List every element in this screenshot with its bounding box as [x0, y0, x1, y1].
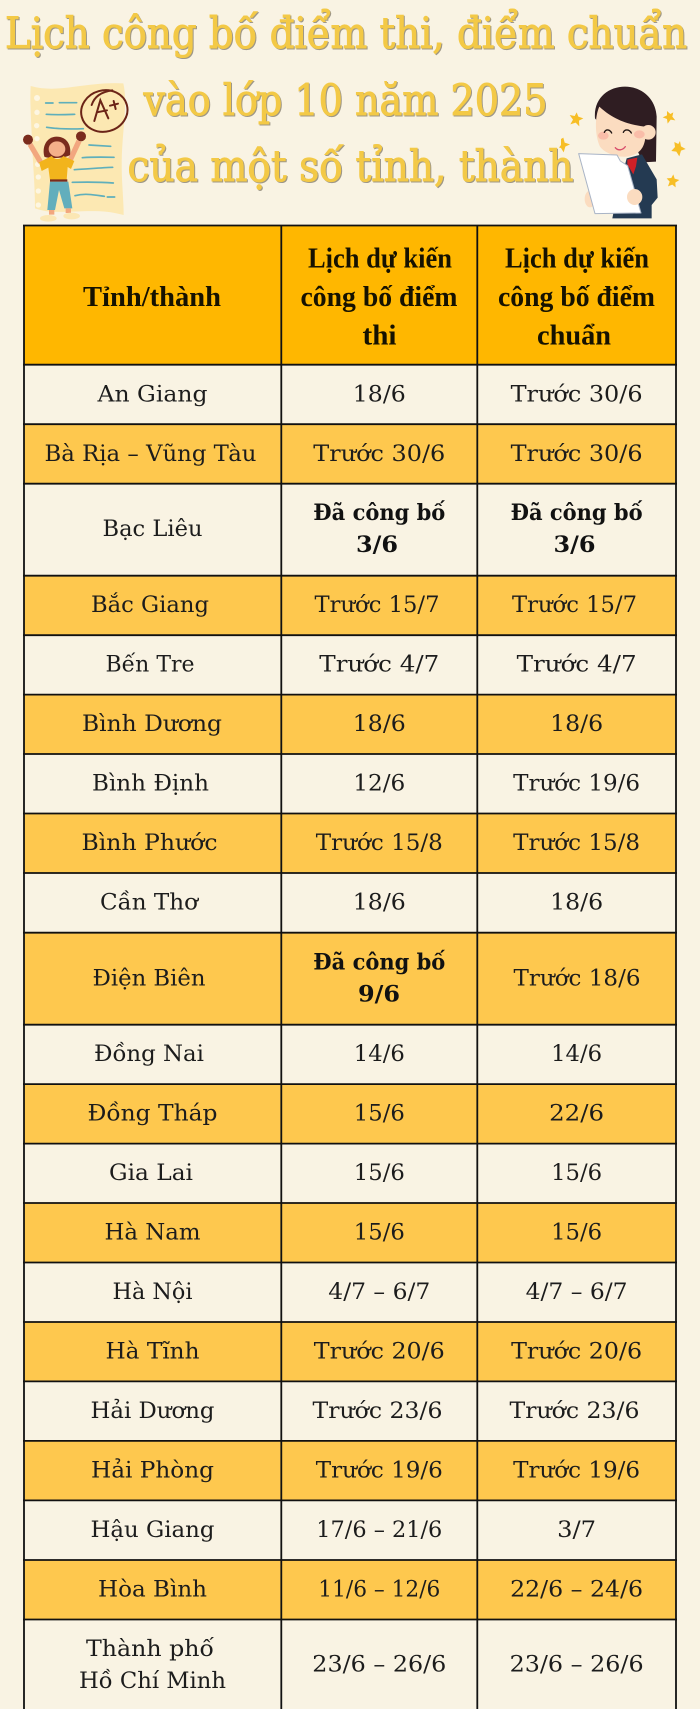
- row: Bắc Giang: Trước 15/7: [512, 592, 637, 618]
- row: Bình Định: 12/6: [353, 770, 405, 796]
- row: Gia Lai: [109, 1160, 602, 1186]
- icon: student with graded paper: [23, 83, 132, 222]
- row: Bà Rịa - Vũng Tàu: Bà Rịa – Vũng Tàu: [44, 441, 256, 467]
- row: Bạc Liêu: [102, 500, 643, 558]
- row: Bà Rịa - Vũng Tàu: Trước 30/6: [313, 441, 445, 467]
- row: Điện Biên: [24, 933, 676, 1025]
- row: Điện Biên: Đã công bố: [313, 950, 445, 976]
- row: Thành phố Hồ Chí Minh: 23/6 – 26/6: [312, 1652, 446, 1678]
- row: Gia Lai: 15/6: [354, 1160, 405, 1186]
- row: Bắc Giang: [24, 576, 676, 635]
- row: Hải Dương: Trước 23/6: [312, 1398, 442, 1424]
- row: Hải Phòng: [24, 1441, 676, 1500]
- row: Bến Tre: [106, 652, 637, 678]
- row: An Giang: [96, 381, 643, 407]
- row: Hải Dương: Trước 23/6: [510, 1398, 640, 1424]
- row: Đồng Tháp: Đồng Tháp: [88, 1101, 218, 1127]
- row: Thành phố Hồ Chí Minh: Hồ Chí Minh: [79, 1668, 226, 1694]
- row: Điện Biên: 9/6: [358, 982, 400, 1008]
- row: Bình Dương: [24, 695, 676, 754]
- title: vào lớp 10 năm 2025: [143, 76, 547, 126]
- row: Hòa Bình: Hòa Bình: [98, 1576, 207, 1602]
- row: Điện Biên: Điện Biên: [92, 965, 206, 991]
- row: Hải Dương: Hải Dương: [90, 1398, 214, 1424]
- row: Bình Dương: 18/6: [550, 711, 603, 737]
- row: Thành phố Hồ Chí Minh: Thành phố: [86, 1636, 214, 1662]
- row: Hải Dương: [90, 1398, 640, 1424]
- row: Hà Tĩnh: Trước 20/6: [314, 1338, 445, 1364]
- row: Hòa Bình: 22/6 – 24/6: [510, 1576, 643, 1602]
- row: Hà Nam: 15/6: [354, 1220, 405, 1246]
- row: An Giang: Trước 30/6: [511, 381, 643, 407]
- row: Thành phố Hồ Chí Minh: [79, 1636, 644, 1694]
- row: Đồng Nai: [94, 1041, 602, 1067]
- row: Thành phố Hồ Chí Minh: 23/6 – 26/6: [510, 1652, 644, 1678]
- row: Đồng Nai: 14/6: [551, 1041, 602, 1067]
- row: Bình Dương: 18/6: [353, 711, 406, 737]
- row: Hà Nam: [24, 1203, 676, 1262]
- row: Bạc Liêu: Bạc Liêu: [102, 516, 202, 542]
- row: Cần Thơ: 18/6: [550, 890, 603, 916]
- table header row: công bố điểm: [300, 282, 458, 313]
- row: Đồng Tháp: 15/6: [354, 1101, 405, 1127]
- row: Bình Định: Bình Định: [92, 770, 209, 796]
- row: Hậu Giang: Hậu Giang: [90, 1517, 214, 1543]
- row: An Giang: 18/6: [353, 381, 406, 407]
- row: Hậu Giang: [90, 1517, 596, 1543]
- row: Hòa Bình: 11/6 – 12/6: [318, 1576, 440, 1602]
- table header row: Tỉnh/thành: [83, 282, 221, 313]
- row: Bình Phước: Trước 15/8: [513, 830, 640, 856]
- row: Bạc Liêu: 3/6: [554, 532, 596, 558]
- row: Hà Nam: 15/6: [551, 1220, 602, 1246]
- row: Bà Rịa - Vũng Tàu: Trước 30/6: [511, 441, 643, 467]
- table header row: Lịch dự kiến: [505, 244, 649, 274]
- row: Hải Phòng: Trước 19/6: [513, 1458, 640, 1484]
- table header row: thi: [362, 320, 397, 351]
- row: Hà Nam: Hà Nam: [104, 1220, 200, 1246]
- row: Bạc Liêu: 3/6: [356, 532, 398, 558]
- row: An Giang: An Giang: [96, 381, 208, 407]
- row: Hà Nội: 4/7 – 6/7: [526, 1279, 628, 1305]
- row: Đồng Nai: Đồng Nai: [94, 1041, 204, 1067]
- icon: woman reading paper with stars: [559, 87, 686, 218]
- row: Hà Nội: 4/7 – 6/7: [328, 1279, 430, 1305]
- row: Bình Phước: [24, 814, 676, 873]
- title: [5, 9, 687, 192]
- girl figure: [23, 131, 86, 222]
- row: Hà Nội: Hà Nội: [112, 1279, 192, 1305]
- row: Điện Biên: Trước 18/6: [514, 965, 640, 991]
- row: Bình Định: Trước 19/6: [513, 770, 640, 796]
- table header row: [24, 226, 676, 365]
- row: Bình Dương: Bình Dương: [82, 711, 222, 737]
- row: Bình Phước: Bình Phước: [82, 830, 218, 856]
- row: Bến Tre: Bến Tre: [106, 652, 194, 678]
- row: Bắc Giang: Bắc Giang: [91, 592, 209, 618]
- row: Gia Lai: 15/6: [551, 1160, 602, 1186]
- row: Bến Tre: Trước 4/7: [319, 652, 439, 678]
- row: Hải Phòng: Trước 19/6: [316, 1458, 443, 1484]
- row: Hải Phòng: Hải Phòng: [91, 1458, 214, 1484]
- row: Đồng Nai: 14/6: [354, 1041, 405, 1067]
- row: Hà Tĩnh: Trước 20/6: [511, 1338, 642, 1364]
- row: Bình Phước: Trước 15/8: [316, 830, 443, 856]
- table header row: Lịch dự kiến: [308, 244, 452, 274]
- row: Bình Định: [92, 770, 640, 796]
- row: Cần Thơ: [100, 890, 603, 916]
- row: Cần Thơ: Cần Thơ: [100, 890, 199, 916]
- row: Gia Lai: Gia Lai: [109, 1160, 193, 1186]
- row: Đồng Tháp: [24, 1084, 676, 1144]
- row: Hậu Giang: 17/6 – 21/6: [316, 1517, 442, 1543]
- row: Cần Thơ: 18/6: [353, 890, 406, 916]
- table header row: công bố điểm: [498, 282, 655, 313]
- row: Bạc Liêu: Đã công bố: [313, 500, 445, 526]
- row: Hà Tĩnh: [24, 1322, 676, 1381]
- row: Bà Rịa - Vũng Tàu: [24, 424, 676, 484]
- row: Hà Nội: [112, 1279, 628, 1305]
- row: Đồng Tháp: 22/6: [549, 1101, 604, 1127]
- row: Hòa Bình: [24, 1560, 676, 1620]
- title: của một số tỉnh, thành: [128, 142, 574, 192]
- row: Hà Tĩnh: Hà Tĩnh: [106, 1338, 200, 1364]
- row: Hậu Giang: 3/7: [557, 1517, 596, 1543]
- row: Bến Tre: Trước 4/7: [517, 652, 637, 678]
- row: Bắc Giang: Trước 15/7: [314, 592, 440, 618]
- table header row: chuẩn: [537, 320, 611, 351]
- row: Bạc Liêu: Đã công bố: [511, 500, 643, 526]
